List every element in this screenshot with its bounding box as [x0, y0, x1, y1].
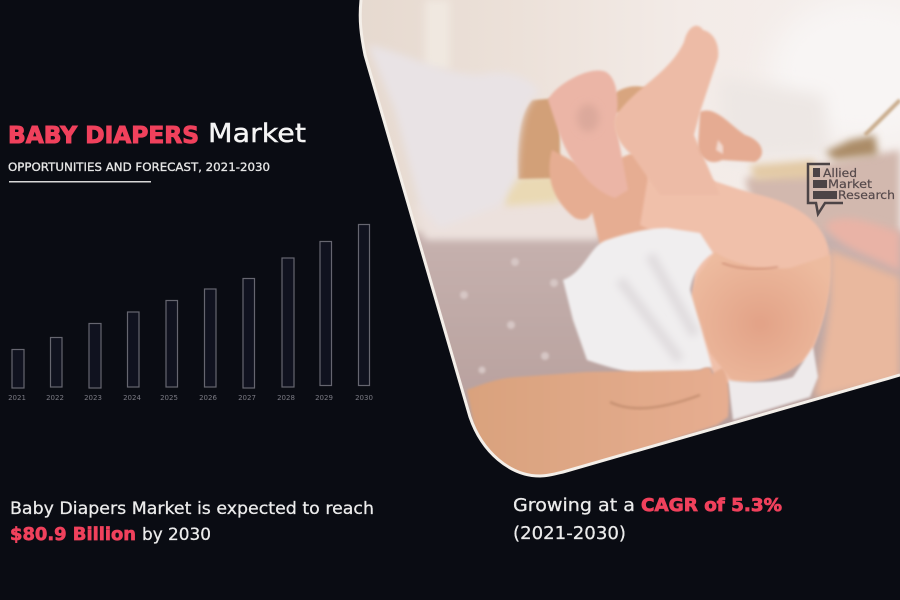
year labels: 2029: [315, 394, 333, 402]
year labels: 2021: [8, 394, 26, 402]
title: Market: [208, 119, 306, 149]
caregiver lower hand: [467, 367, 729, 480]
CAGR callout: CAGR of 5.3%: [641, 495, 782, 516]
logo: Allied Market Research: Market: [828, 177, 873, 191]
right foot: [614, 26, 720, 195]
thumb and fingers: [698, 111, 762, 162]
diaper: [563, 228, 713, 378]
caregiver forearm behind: [517, 98, 560, 179]
year labels: 2028: [277, 394, 295, 402]
logo: Allied Market Research: [808, 164, 895, 214]
year labels: 2026: [199, 394, 217, 402]
year labels: [8, 394, 373, 402]
bedding: [418, 229, 900, 446]
market size callout: [10, 499, 374, 545]
logo: Allied Market Research: Allied: [823, 166, 857, 180]
market size callout: Baby Diapers Market is expected to reach: [10, 499, 374, 519]
left caregiver hand: [549, 150, 650, 244]
body: [815, 250, 900, 398]
year labels: 2027: [238, 394, 256, 402]
baby hand at right: [825, 218, 900, 272]
title: BABY DIAPERS: [8, 123, 199, 149]
market size callout: by 2030: [142, 525, 211, 545]
year labels: 2025: [160, 394, 178, 402]
baby leg: [640, 165, 830, 385]
CAGR callout: [513, 495, 782, 544]
sleeve: [370, 46, 538, 212]
logo: Allied Market Research: Research: [838, 188, 895, 202]
year labels: 2023: [84, 394, 102, 402]
CAGR callout: Growing at a: [513, 495, 635, 516]
year labels: 2022: [46, 394, 64, 402]
CAGR callout: (2021-2030): [513, 523, 626, 544]
left foot: [548, 71, 628, 198]
thigh: [690, 252, 830, 383]
photo border: [360, 0, 900, 476]
year labels: 2024: [123, 394, 141, 402]
subtitle underline: [9, 181, 151, 182]
right-side blanket and backdrop: [768, 90, 825, 144]
market size callout: $80.9 Billion: [10, 524, 136, 545]
bar chart: [8, 224, 373, 402]
year labels: 2030: [355, 394, 373, 402]
photo: baby feet and diaper: [355, 0, 900, 482]
subtitle: OPPORTUNITIES AND FORECAST, 2021-2030: [8, 160, 270, 174]
title: [8, 119, 306, 149]
